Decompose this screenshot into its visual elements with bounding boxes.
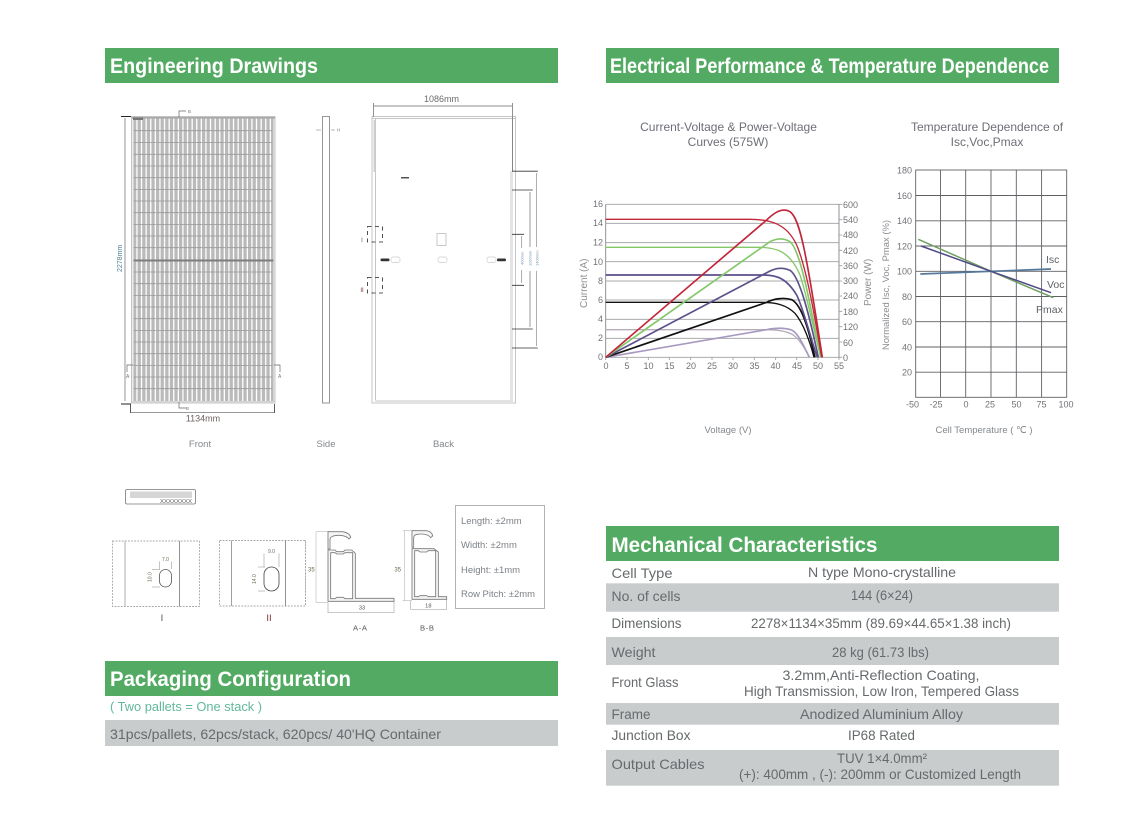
drawing: front view of module: B <box>186 406 189 411</box>
drawing: detail II: 9.0 <box>268 549 275 555</box>
x axis labels: -25 <box>929 400 943 410</box>
row: output cables: Output Cables <box>612 756 704 772</box>
chart title: I-V curves: Current-Voltage & Power-Voltage <box>640 120 817 134</box>
left axis: current: 2 <box>598 333 603 343</box>
dimension lines: mounting holes: 1400mm <box>534 250 540 266</box>
view labels: Front, Side, Back: Back <box>433 439 454 450</box>
row: weight: 28 kg (61.73 lbs) <box>832 644 929 660</box>
heading: Packaging Configuration: Packaging Configuration <box>110 668 351 691</box>
right axis: power: 240 <box>843 291 858 301</box>
drawing: barcode label: XXXXXXXX <box>160 499 193 505</box>
row: front glass: 3.2mm,Anti-Reflection Coating, <box>782 667 980 683</box>
drawing: front view of module: B <box>188 109 191 114</box>
right axis: power: 0 <box>843 353 848 363</box>
series labels: Voc <box>1047 279 1065 291</box>
row: number of cells: No. of cells <box>612 588 680 604</box>
row: frame: Frame <box>612 706 651 722</box>
bottom axis: voltage: 25 <box>707 361 717 371</box>
y axis labels: 100 <box>897 266 912 276</box>
row: weight: Weight <box>612 644 656 660</box>
y axis labels: 80 <box>902 292 912 302</box>
right axis: power <box>843 200 874 363</box>
drawing: detail II: II <box>266 613 272 624</box>
connectors and junction boxes <box>380 234 506 262</box>
drawing: front view of module: A <box>126 374 130 380</box>
drawing: front view of module: A <box>278 374 282 380</box>
detail markers I and II: I <box>361 238 363 244</box>
row: output cables: TUV 1×4.0mm² <box>837 750 927 766</box>
x axis labels: 50 <box>1011 400 1022 410</box>
tolerance box: Row Pitch: ±2mm <box>461 589 535 600</box>
drawing: detail I: 10.0 <box>148 572 154 582</box>
drawing: frame section A-A: 35 <box>308 568 315 574</box>
right axis: power: 600 <box>843 200 858 210</box>
drawing: frame section A-A <box>305 532 394 632</box>
y axis labels: 160 <box>897 191 912 201</box>
bottom axis: voltage: 15 <box>664 361 675 371</box>
right axis: power: 300 <box>843 276 858 286</box>
bottom axis: voltage: 5 <box>624 361 630 371</box>
section markers B and A <box>127 111 280 408</box>
curves: lowest irradiance <box>606 328 809 357</box>
drawing: frame section B-B <box>394 531 447 632</box>
left axis: current: 0 <box>598 352 603 362</box>
view labels: Front, Side, Back: Side <box>316 439 336 450</box>
dimension: 1134mm: 1134mm <box>186 414 220 424</box>
row: dimensions <box>612 615 1011 631</box>
x axis labels: 0 <box>963 400 969 410</box>
row: output cables: (+): 400mm , (-): 200mm or Customized Length <box>739 766 1021 782</box>
row: junction box: IP68 Rated <box>848 727 915 743</box>
row: dimensions: Dimensions <box>612 615 682 631</box>
y axis labels: 20 <box>902 368 912 378</box>
y axis labels: 40 <box>902 342 912 352</box>
note: two pallets: ( Two pallets = One stack ) <box>110 699 262 714</box>
right axis: power: 480 <box>843 230 858 240</box>
y axis labels: 60 <box>902 317 912 327</box>
row: number of cells <box>612 587 913 604</box>
dimension: 1086mm <box>374 94 512 171</box>
row: junction box: Junction Box <box>612 727 690 743</box>
y axis labels: 140 <box>897 216 912 226</box>
right axis: power: 360 <box>843 261 858 271</box>
chart title: temperature dependence: Temperature Dependence of <box>911 120 1064 134</box>
dimension: 2278mm <box>117 116 131 404</box>
row: front glass: Front Glass <box>612 674 678 690</box>
dimension: 1134mm <box>130 404 274 424</box>
chart title: temperature dependence <box>911 120 1064 149</box>
left axis: current: 4 <box>598 314 603 324</box>
bottom axis: voltage: Voltage (V) <box>704 425 752 436</box>
curves: red <box>606 210 822 357</box>
bottom axis: voltage: 50 <box>813 361 823 371</box>
bottom axis: voltage: 35 <box>749 361 760 371</box>
bottom axis: voltage: 30 <box>728 361 738 371</box>
right axis: power: 540 <box>843 215 858 225</box>
dimension lines: mounting holes: 400mm <box>520 251 524 265</box>
drawing: frame section B-B: B-B <box>420 623 435 632</box>
right axis: power: Power (W) <box>863 259 874 306</box>
line chart: temperature dependence: Normalized Isc, Voc, Pmax (%) <box>881 220 892 350</box>
bottom axis: voltage: 0 <box>603 361 609 371</box>
row: cell type: Cell Type <box>612 565 673 581</box>
tolerance box: Length: ±2mm <box>461 516 522 527</box>
heading: Packaging Configuration <box>105 661 558 696</box>
row: junction box <box>612 727 915 743</box>
drawing: frame section B-B: 18 <box>425 604 431 610</box>
bottom axis: voltage: 20 <box>686 361 696 371</box>
tolerance box <box>456 506 544 608</box>
drawing: frame section B-B: 35 <box>394 567 402 573</box>
packaging details row <box>105 720 558 746</box>
drawing: detail II: 14.0 <box>252 574 258 584</box>
line: Pmax <box>918 239 1053 298</box>
curves: purple <box>606 268 818 357</box>
dimension lines: mounting holes <box>512 171 540 348</box>
chart title: I-V curves: Curves (575W) <box>688 135 768 149</box>
tolerance box: Height: ±1mm <box>461 565 520 576</box>
heading: Electrical Performance & Temperature Dependence <box>606 48 1059 83</box>
bottom axis: voltage <box>603 361 844 436</box>
bottom axis: voltage: 40 <box>770 361 781 371</box>
view labels: Front, Side, Back <box>189 439 454 450</box>
dimension lines: mounting holes: 1100mm <box>528 250 532 266</box>
heading: Electrical Performance & Temperature Dependence: Electrical Performance & Temperature Dependence <box>610 55 1049 78</box>
series labels <box>1036 254 1065 316</box>
y axis labels <box>897 166 912 378</box>
x axis labels: 75 <box>1036 400 1047 410</box>
curves: green <box>606 239 821 357</box>
right axis: power: 180 <box>843 307 858 317</box>
row: cell type <box>612 564 956 581</box>
row: cell type: N type Mono-crystalline <box>808 564 956 580</box>
drawing: barcode label <box>126 490 196 505</box>
drawing: side view of module: H <box>337 128 340 132</box>
left axis: current: 16 <box>593 199 603 209</box>
drawing: side view of module <box>316 116 340 403</box>
line: Voc <box>921 246 1051 293</box>
right axis: power: 120 <box>843 322 858 332</box>
heading: Mechanical Characteristics: Mechanical Characteristics <box>612 534 878 557</box>
left axis: current <box>579 199 603 362</box>
drawing: detail I: 7.0 <box>162 557 169 563</box>
drawing: detail I <box>112 541 200 624</box>
drawing: detail II <box>220 540 306 624</box>
left axis: current: 14 <box>593 218 603 228</box>
row: weight <box>612 644 929 660</box>
row: front glass <box>612 667 1019 699</box>
line chart: temperature dependence <box>881 166 1074 436</box>
bottom axis: voltage: 55 <box>834 361 844 371</box>
chart title: I-V curves <box>640 120 817 149</box>
row: number of cells: 144 (6×24) <box>851 587 913 603</box>
x axis labels: Cell Temperature ( ℃ ) <box>935 425 1033 436</box>
packaging details row: 31pcs/pallets, 62pcs/stack, 620pcs/ 40'HQ Container <box>110 726 441 742</box>
x axis labels: 25 <box>985 400 995 410</box>
row backgrounds <box>606 583 1059 786</box>
right axis: power: 420 <box>843 246 858 256</box>
row: dimensions: 2278×1134×35mm (89.69×44.65×1.38 inch) <box>751 615 1011 631</box>
drawing: detail I: I <box>161 613 163 624</box>
row: frame <box>612 706 963 722</box>
bottom axis: voltage: 45 <box>792 361 802 371</box>
left axis: current: 10 <box>593 257 603 267</box>
left axis: current: 6 <box>598 295 603 305</box>
tolerance box: Width: ±2mm <box>461 540 517 551</box>
drawing: front view of module <box>117 109 282 424</box>
y axis labels: 120 <box>897 242 912 252</box>
row: output cables <box>612 750 1021 782</box>
heading: Engineering Drawings <box>105 48 558 83</box>
drawing: back view of module <box>360 94 540 403</box>
drawing: frame section A-A: A-A <box>353 623 368 632</box>
x axis labels: 100 <box>1058 400 1074 410</box>
left axis: current: 12 <box>593 238 603 248</box>
x axis labels <box>906 400 1074 436</box>
left axis: current: Current (A) <box>579 259 590 308</box>
left axis: current: 8 <box>598 276 603 286</box>
curves: black <box>606 298 815 357</box>
series labels: Isc <box>1046 254 1059 266</box>
dimension: 1086mm: 1086mm <box>424 94 459 104</box>
chart title: temperature dependence: Isc,Voc,Pmax <box>951 135 1023 149</box>
table: mechanical characteristics <box>606 564 1059 786</box>
view labels: Front, Side, Back: Front <box>189 439 211 450</box>
right axis: power: 60 <box>843 338 853 348</box>
bottom axis: voltage: 10 <box>643 361 654 371</box>
y axis labels: 180 <box>897 166 912 176</box>
detail markers I and II <box>360 226 382 294</box>
dimension: 2278mm: 2278mm <box>117 245 124 272</box>
line chart: current-voltage and power-voltage curves <box>579 199 874 436</box>
heading: Mechanical Characteristics <box>606 526 1059 561</box>
heading: Engineering Drawings: Engineering Drawings <box>110 55 318 78</box>
line: Isc <box>920 269 1051 274</box>
detail markers I and II: II <box>360 288 364 294</box>
row: front glass: High Transmission, Low Iron, Tempered Glass <box>744 683 1019 699</box>
series labels: Pmax <box>1036 304 1064 316</box>
x axis labels: -50 <box>906 400 919 410</box>
row: frame: Anodized Aluminium Alloy <box>800 706 963 722</box>
drawing: frame section A-A: 33 <box>359 606 365 612</box>
